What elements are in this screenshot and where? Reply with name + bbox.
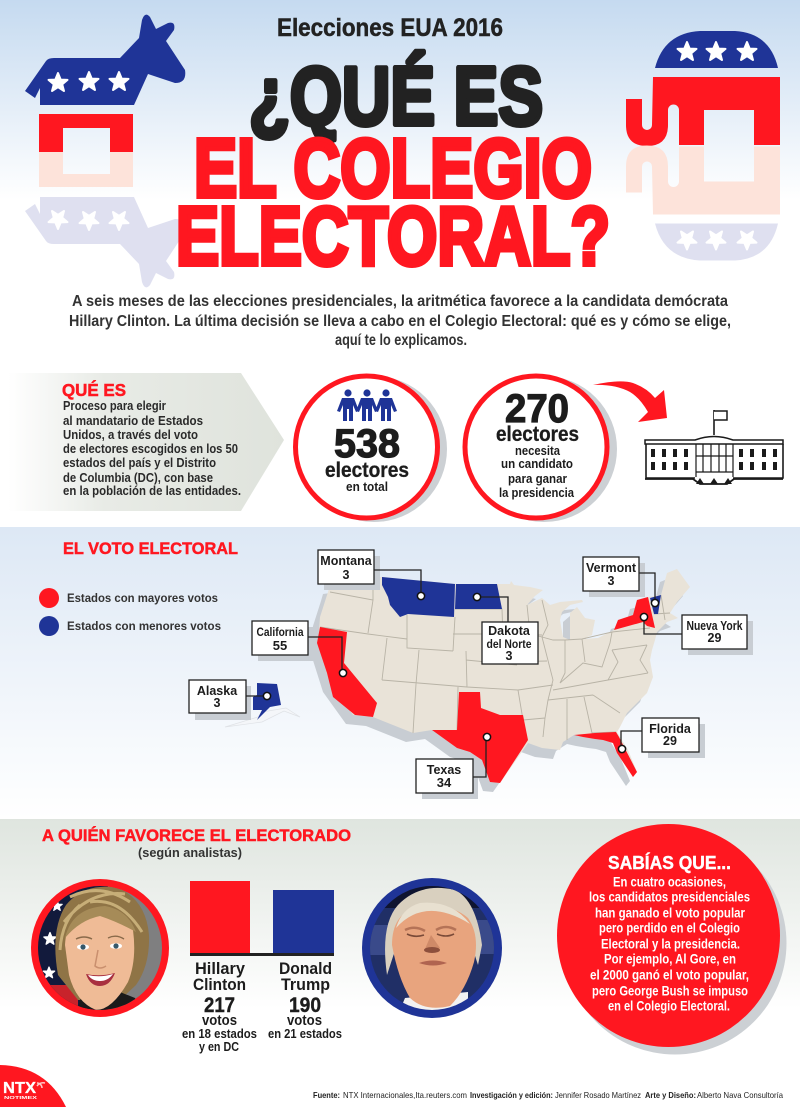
bar label: Donald Trump: votos xyxy=(287,1012,322,1029)
callout: Montana: Montana xyxy=(320,554,373,568)
callout: Vermont: Vermont xyxy=(586,561,637,575)
callout: Alaska: Alaska xyxy=(197,684,238,698)
state: Florida xyxy=(574,732,637,777)
circle: 270 electores: un candidato xyxy=(501,457,573,471)
state: Alaska xyxy=(225,683,300,727)
portrait: Hillary Clinton xyxy=(31,879,169,1017)
source credits: NTX Internacionales,Ita.reuters.com xyxy=(343,1090,467,1100)
definition text: en la población de las entidades. xyxy=(63,484,241,498)
callout heading: SABÍAS QUE... xyxy=(608,852,731,873)
panel: favored candidate background xyxy=(0,819,800,1009)
arrow to White House xyxy=(593,381,667,422)
callout text: los candidatos presidenciales xyxy=(589,890,750,904)
callout: Dakota del Norte xyxy=(473,593,538,664)
callout: Nueva York xyxy=(640,613,753,655)
intro text: aquí te lo explicamos. xyxy=(335,332,467,349)
header background xyxy=(0,0,800,200)
definition text xyxy=(63,399,241,498)
circle: 538 electores: 538 xyxy=(334,422,400,466)
callout: Vermont xyxy=(583,557,659,607)
subheading: (según analistas) xyxy=(138,845,242,860)
circle: 538 electores: electores xyxy=(325,459,409,482)
logo: NTX Notimex: NTX xyxy=(3,1080,36,1097)
bar label: Hillary Clinton: Hillary xyxy=(195,959,246,978)
callout text xyxy=(589,874,750,1014)
map of the United States xyxy=(225,569,690,792)
source credits: Fuente: xyxy=(313,1090,340,1100)
title: ELECTORAL? xyxy=(176,190,610,282)
panel: qué es xyxy=(8,373,284,511)
portrait: Donald Trump xyxy=(362,878,502,1018)
bar chart xyxy=(182,881,342,1054)
callout text: pero perdido en el Colegio xyxy=(599,920,740,936)
callout text: han ganado el voto popular xyxy=(595,906,746,920)
circle: 538 electores: en total xyxy=(346,480,388,494)
callout: Texas: 34 xyxy=(437,775,452,790)
circle: 270 electores: necesita xyxy=(515,444,561,458)
bar label: Hillary Clinton: en 18 estados xyxy=(182,1027,257,1041)
state: Dakota del Norte xyxy=(455,584,502,609)
bar label: Hillary Clinton: y en DC xyxy=(199,1040,239,1054)
source credits: Jennifer Rosado Martínez xyxy=(555,1090,641,1100)
circle: 270 electores xyxy=(465,376,617,522)
legend: Estados con mayores votos xyxy=(67,591,218,605)
heading: el voto electoral: EL VOTO ELECTORAL xyxy=(63,539,238,558)
definition text: estados del país y el Distrito xyxy=(63,456,216,470)
intro text xyxy=(69,293,731,349)
callout: Florida: 29 xyxy=(663,734,677,748)
bar label: Donald Trump: Trump xyxy=(281,975,330,994)
definition text: Unidos, a través del voto xyxy=(63,428,198,442)
intro text: Hillary Clinton. La última decisión se lleva a cabo en el Colegio Electoral: qué es y cómo se elige, xyxy=(69,313,731,330)
callout text: En cuatro ocasiones, xyxy=(613,874,726,890)
bar label: Donald Trump: en 21 estados xyxy=(268,1027,342,1041)
callout: California: 55 xyxy=(273,638,287,653)
callout: Florida xyxy=(618,718,705,758)
state: California xyxy=(317,627,377,717)
state borders xyxy=(320,577,670,740)
callout: Montana: 3 xyxy=(343,568,350,582)
callout: California xyxy=(252,621,347,677)
intro text: A seis meses de las elecciones presidenciales, la aritmética favorece a la candidata demócrata xyxy=(72,293,728,310)
callout text: en el Colegio Electoral. xyxy=(608,998,730,1014)
callout: Texas xyxy=(416,733,491,799)
callout text: pero George Bush se impuso xyxy=(592,984,748,998)
callout: Nueva York: 29 xyxy=(708,631,721,645)
definition text: Proceso para elegir xyxy=(63,399,166,413)
circle: 270 electores: para ganar xyxy=(508,472,567,486)
state: Texas xyxy=(432,692,528,783)
callout: Vermont: 3 xyxy=(608,574,615,588)
callout text: el 2000 ganó el voto popular, xyxy=(590,968,749,982)
definition text: de electores escogidos en los 50 xyxy=(63,442,238,456)
source credits xyxy=(313,1090,783,1100)
definition text: al mandatario de Estados xyxy=(63,414,203,428)
panel: electoral vote background xyxy=(0,527,800,819)
title: ¿QUÉ ES xyxy=(249,50,543,142)
state: Vermont xyxy=(650,595,661,614)
bar label: Hillary Clinton: votos xyxy=(202,1012,237,1029)
callout: Dakota del Norte: Dakota xyxy=(488,624,531,638)
circle: 270 electores: 270 xyxy=(505,387,569,431)
heading: a quién favorece: A QUIÉN FAVORECE EL ELECTORADO xyxy=(42,826,351,845)
bar label: Donald Trump: Donald xyxy=(279,959,332,978)
bar label: Hillary Clinton: Clinton xyxy=(193,975,246,994)
circle: 270 electores: la presidencia xyxy=(499,486,575,500)
callout: Dakota del Norte: 3 xyxy=(506,649,513,663)
title xyxy=(176,14,610,282)
circle: 270 electores: electores xyxy=(496,423,579,446)
legend: Estados con menores votos xyxy=(67,619,221,633)
callout: Montana xyxy=(318,550,425,600)
logo: NTX Notimex: NOTIMEX xyxy=(4,1095,37,1100)
icon: democratic donkey xyxy=(25,15,185,287)
callout: Alaska: 3 xyxy=(214,696,221,710)
source credits: Investigación y edición: xyxy=(470,1090,553,1100)
bar label: Donald Trump xyxy=(268,959,342,1041)
bar label: Hillary Clinton: 217 xyxy=(204,994,235,1017)
bar label: Donald Trump: 190 xyxy=(289,994,321,1017)
logo: NTX Notimex xyxy=(0,1065,66,1107)
icon: White House xyxy=(645,410,783,484)
callout: Nueva York: Nueva York xyxy=(686,619,743,633)
definition text: de Columbia (DC), con base xyxy=(63,471,213,485)
callouts xyxy=(189,550,753,799)
callout text: Por ejemplo, Al Gore, en xyxy=(604,952,736,966)
callout text: Electoral y la presidencia. xyxy=(601,936,740,952)
callout: sabías que xyxy=(557,824,786,1054)
state: Nueva York xyxy=(614,597,655,630)
heading: qué es: QUÉ ES xyxy=(62,379,126,400)
callout: Florida: Florida xyxy=(649,722,692,736)
source credits: Arte y Diseño: xyxy=(645,1090,696,1100)
circle: 538 electores xyxy=(296,376,447,522)
icon: republican elephant xyxy=(626,31,780,260)
state: Montana xyxy=(382,577,455,617)
callout: Alaska xyxy=(189,680,271,720)
title: Elecciones EUA 2016 xyxy=(277,14,503,42)
bar label: Hillary Clinton xyxy=(182,959,257,1054)
legend xyxy=(39,588,221,636)
title: EL COLEGIO xyxy=(194,122,592,214)
callout: Dakota del Norte: del Norte xyxy=(486,637,532,651)
callout: California: California xyxy=(256,625,304,639)
callout: Texas: Texas xyxy=(427,763,461,777)
source credits: Alberto Nava Consultoría xyxy=(697,1090,783,1100)
icon: three people xyxy=(337,389,397,421)
